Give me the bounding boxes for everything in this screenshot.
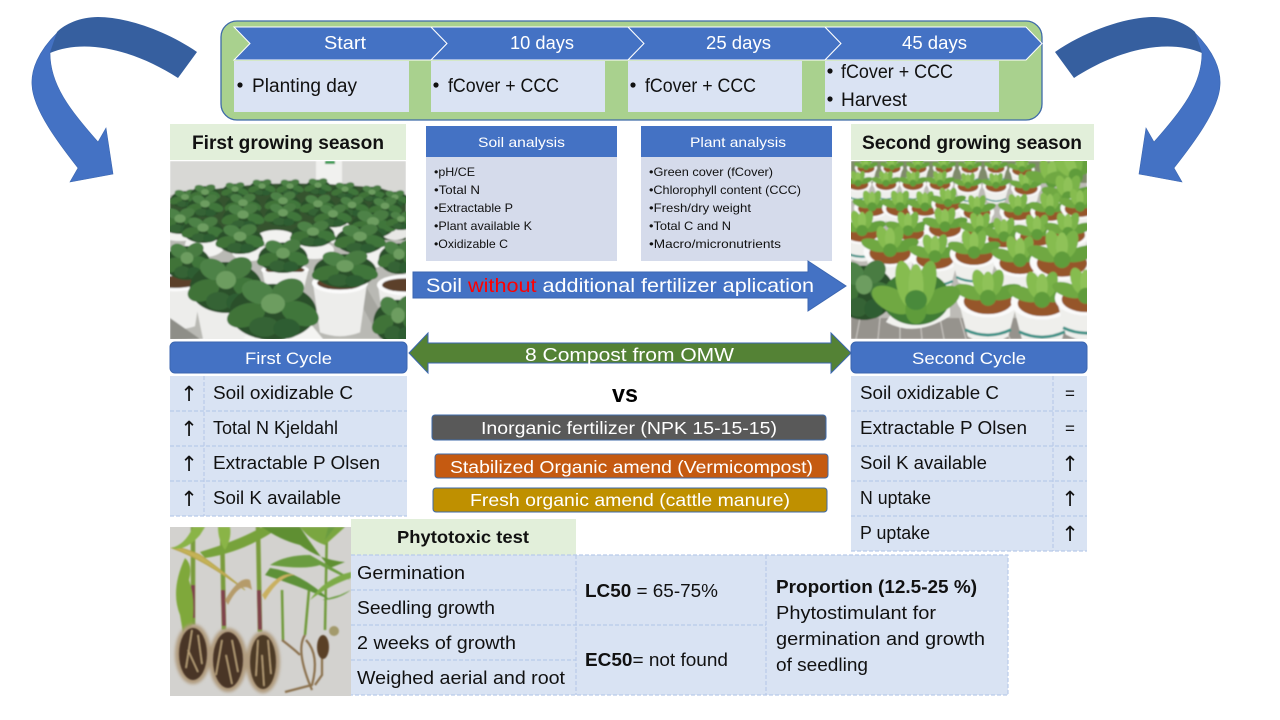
heading: First growing season	[170, 124, 406, 160]
timeline step: 25 days: 25 days	[706, 32, 771, 53]
table: second cycle results: P uptake	[860, 523, 930, 543]
timeline step: 25 days	[628, 27, 841, 112]
table: first cycle results: Soil oxidizable C	[213, 383, 353, 403]
timeline step: 45 days: Harvest	[841, 90, 908, 111]
panel: plant analysis: •Green cover (fCover)	[649, 165, 773, 179]
table: first cycle results: ↑	[180, 417, 198, 441]
bar: inorganic fertilizer	[432, 415, 826, 440]
panel: plant analysis: •Chlorophyll content (CCC)	[649, 183, 801, 197]
timeline step: 10 days: fCover + CCC	[448, 76, 559, 97]
table: first cycle results: Extractable P Olsen	[213, 453, 380, 473]
photo: first season lettuce in white pots	[170, 161, 406, 339]
table: phytotoxic test: EC50= not found	[585, 650, 728, 670]
photo: maize plants with roots	[170, 527, 351, 696]
panel: soil analysis: •Oxidizable C	[434, 237, 508, 251]
timeline step: Start: Start	[324, 32, 366, 53]
timeline step: 25 days: fCover + CCC	[645, 76, 756, 97]
table: phytotoxic test: LC50 = 65-75%	[585, 581, 718, 601]
button: Second Cycle	[851, 342, 1087, 373]
arrow: soil without additional fertilizer: Soil without additional fertilizer aplication	[426, 275, 814, 297]
table: phytotoxic test: 2 weeks of growth	[357, 633, 516, 653]
table: phytotoxic test: Seedling growth	[357, 598, 495, 618]
bar: fresh organic amend	[433, 488, 827, 512]
panel: plant analysis: Plant analysis	[690, 134, 786, 150]
bar: inorganic fertilizer: Inorganic fertilizer (NPK 15-15-15)	[481, 418, 777, 438]
heading: First growing season: First growing season	[192, 133, 384, 154]
photo: second season lettuce in white pots	[851, 161, 1087, 339]
table: phytotoxic test: Phytostimulant for	[776, 603, 936, 623]
panel: timeline	[221, 21, 1042, 120]
table: first cycle results: ↑	[180, 487, 198, 511]
double arrow: 8 Compost from OMW: 8 Compost from OMW	[525, 344, 735, 365]
table: second cycle results: =	[1065, 419, 1075, 438]
heading: Phytotoxic test: Phytotoxic test	[397, 527, 529, 547]
table: second cycle results: Extractable P Olsen	[860, 418, 1027, 438]
table: phytotoxic test: germination and growth	[776, 629, 985, 649]
table: first cycle results: Total N Kjeldahl	[213, 418, 338, 438]
table: first cycle results: ↑	[180, 382, 198, 406]
heading: Phytotoxic test	[351, 519, 576, 555]
table: second cycle results: =	[1065, 384, 1075, 403]
bar: fresh organic amend: Fresh organic amend (cattle manure)	[470, 490, 790, 510]
table: phytotoxic test: Weighed aerial and root	[357, 668, 565, 688]
panel: soil analysis: •Plant available K	[434, 219, 532, 233]
panel: soil analysis: •Extractable P	[434, 201, 513, 215]
table: phytotoxic test: Germination	[357, 563, 465, 583]
table: first cycle results: Soil K available	[213, 488, 341, 508]
table: phytotoxic test	[351, 555, 1008, 695]
panel: plant analysis: •Macro/micronutrients	[649, 237, 781, 251]
button: First Cycle: First Cycle	[245, 349, 332, 368]
heading: Second growing season	[851, 124, 1094, 160]
panel: soil analysis: Soil analysis	[478, 134, 565, 150]
bar: stabilized organic amend	[435, 454, 828, 478]
curved arrow: left	[32, 17, 197, 182]
root balls	[175, 624, 280, 693]
panel: plant analysis: •Fresh/dry weight	[649, 201, 752, 215]
button: Second Cycle: Second Cycle	[912, 349, 1026, 368]
table: second cycle results	[851, 376, 1087, 551]
table: second cycle results: ↑	[1061, 452, 1079, 476]
table: first cycle results	[170, 376, 407, 516]
table: second cycle results: ↑	[1061, 487, 1079, 511]
double arrow: 8 Compost from OMW	[409, 333, 851, 373]
timeline step: 10 days: 10 days	[510, 32, 574, 53]
panel: soil analysis: •Total N	[434, 183, 480, 197]
heading: Second growing season: Second growing season	[862, 133, 1082, 154]
table: phytotoxic test: of seedling	[776, 655, 868, 675]
panel: soil analysis: •pH/CE	[434, 165, 475, 179]
timeline step: 45 days	[825, 27, 1042, 112]
bar: stabilized organic amend: Stabilized Organic amend (Vermicompost)	[450, 457, 813, 477]
timeline step: 45 days: fCover + CCC	[841, 62, 953, 83]
table: first cycle results: ↑	[180, 452, 198, 476]
panel: plant analysis: •Total C and N	[649, 219, 731, 233]
timeline step: 45 days: 45 days	[902, 32, 967, 53]
table: phytotoxic test: Proportion (12.5-25 %)	[776, 577, 977, 597]
button: First Cycle	[170, 342, 407, 373]
panel: soil analysis	[426, 126, 617, 261]
table: second cycle results: Soil oxidizable C	[860, 383, 999, 403]
table: second cycle results: ↑	[1061, 522, 1079, 546]
icon: VS: vs	[612, 381, 638, 408]
timeline step: Start: Planting day	[252, 76, 357, 97]
table: second cycle results: N uptake	[860, 488, 931, 508]
curved arrow: right	[1055, 17, 1220, 182]
table: second cycle results: Soil K available	[860, 453, 987, 473]
arrow: soil without additional fertilizer	[413, 261, 846, 311]
timeline step: 10 days	[431, 27, 644, 112]
timeline step: Start	[234, 27, 447, 112]
panel: plant analysis	[641, 126, 832, 261]
